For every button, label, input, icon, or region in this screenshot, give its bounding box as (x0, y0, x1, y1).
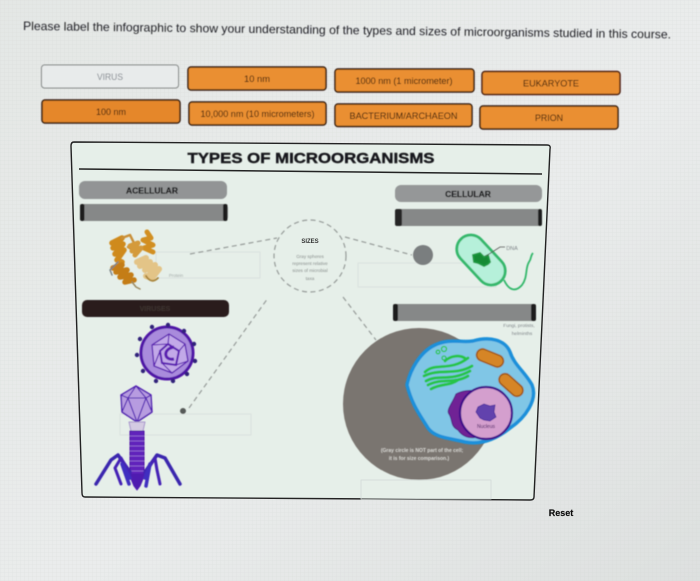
label: 1000 nm (335, 69, 474, 92)
label: VIRUS (used): VIRUS (97, 72, 123, 82)
organelle: golgi (424, 356, 472, 389)
label: VIRUS (used) (42, 65, 178, 88)
cellular header: CELLULAR (445, 189, 491, 199)
label: EUKARYOTE (482, 72, 620, 94)
label: 10,000 nm: 10,000 nm (10 micrometers) (200, 109, 314, 119)
panel background (71, 142, 550, 500)
label: 100 nm (42, 100, 180, 123)
label: DNA: DNA (506, 246, 518, 252)
label: 10 nm: 10 nm (244, 74, 270, 84)
grey circle note: it is for size comparison.) (389, 456, 449, 462)
icon: eukaryotic cell (407, 339, 533, 443)
eukaryote caption: helminths (512, 331, 533, 337)
grey circle note (381, 448, 463, 462)
bacterium size sphere and answer slot (358, 245, 496, 287)
grey circle note: (Gray circle is NOT part of the cell; (381, 448, 463, 454)
sizes dashed circle with key: sizes of microbial (292, 268, 328, 273)
eukaryote answer slot (393, 304, 536, 321)
sizes dashed circle with key: SIZES (301, 239, 319, 245)
eukaryote size answer slot (361, 480, 491, 499)
organelle: nucleus (460, 387, 512, 439)
sizes dashed circle with key (274, 220, 346, 292)
label: 10 nm (188, 67, 326, 90)
cellular header (395, 185, 542, 202)
prion answer slot and label: Protein (169, 273, 184, 278)
eukaryote caption (503, 323, 535, 337)
label: BACTERIUM/ARCHAEON (335, 104, 472, 126)
label: 100 nm: 100 nm (96, 107, 126, 117)
organelle: endoplasmic reticulum (448, 390, 482, 438)
label: PRION (480, 106, 618, 129)
label: BACTERIUM/ARCHAEON: BACTERIUM/ARCHAEON (350, 111, 458, 121)
infographic panel (71, 142, 550, 500)
sizes dashed circle with key: represent relative (292, 261, 328, 266)
icon: enveloped virus (135, 323, 197, 383)
instruction text: Please label the infographic to show your understanding of the types and sizes of microorganisms studied in this course. (23, 19, 671, 41)
label: 10,000 nm (189, 102, 326, 125)
icon: bacterium (451, 229, 533, 291)
eukaryote caption: Fungi, protists, (503, 323, 535, 329)
dashed leader lines (189, 237, 412, 408)
sizes dashed circle with key: taxa (306, 276, 315, 281)
icon: prion protein (110, 232, 159, 289)
cellular answer slot (395, 209, 542, 226)
label: 1000 nm: 1000 nm (1 micrometer) (356, 76, 453, 86)
acellular answer slot (80, 204, 228, 221)
prion answer slot and label (156, 252, 260, 278)
acellular header: ACELLULAR (126, 186, 178, 196)
label bank (42, 65, 620, 129)
viruses dark bar: VIRUSES (140, 306, 171, 313)
eukaryote size sphere (343, 328, 495, 480)
reset link: Reset (549, 508, 573, 518)
sizes dashed circle with key: Gray spheres (296, 254, 324, 259)
title: TYPES OF MICROORGANISMS (188, 151, 435, 167)
acellular header (79, 181, 227, 199)
label: nucleus: Nucleus (477, 424, 496, 430)
viruses dark bar (82, 300, 229, 317)
organelle: mitochondria (475, 347, 525, 399)
leader dot and virus answer slot (120, 408, 251, 435)
icon: bacteriophage (96, 386, 180, 490)
label: EUKARYOTE: EUKARYOTE (523, 78, 579, 88)
label: PRION: PRION (535, 113, 563, 123)
